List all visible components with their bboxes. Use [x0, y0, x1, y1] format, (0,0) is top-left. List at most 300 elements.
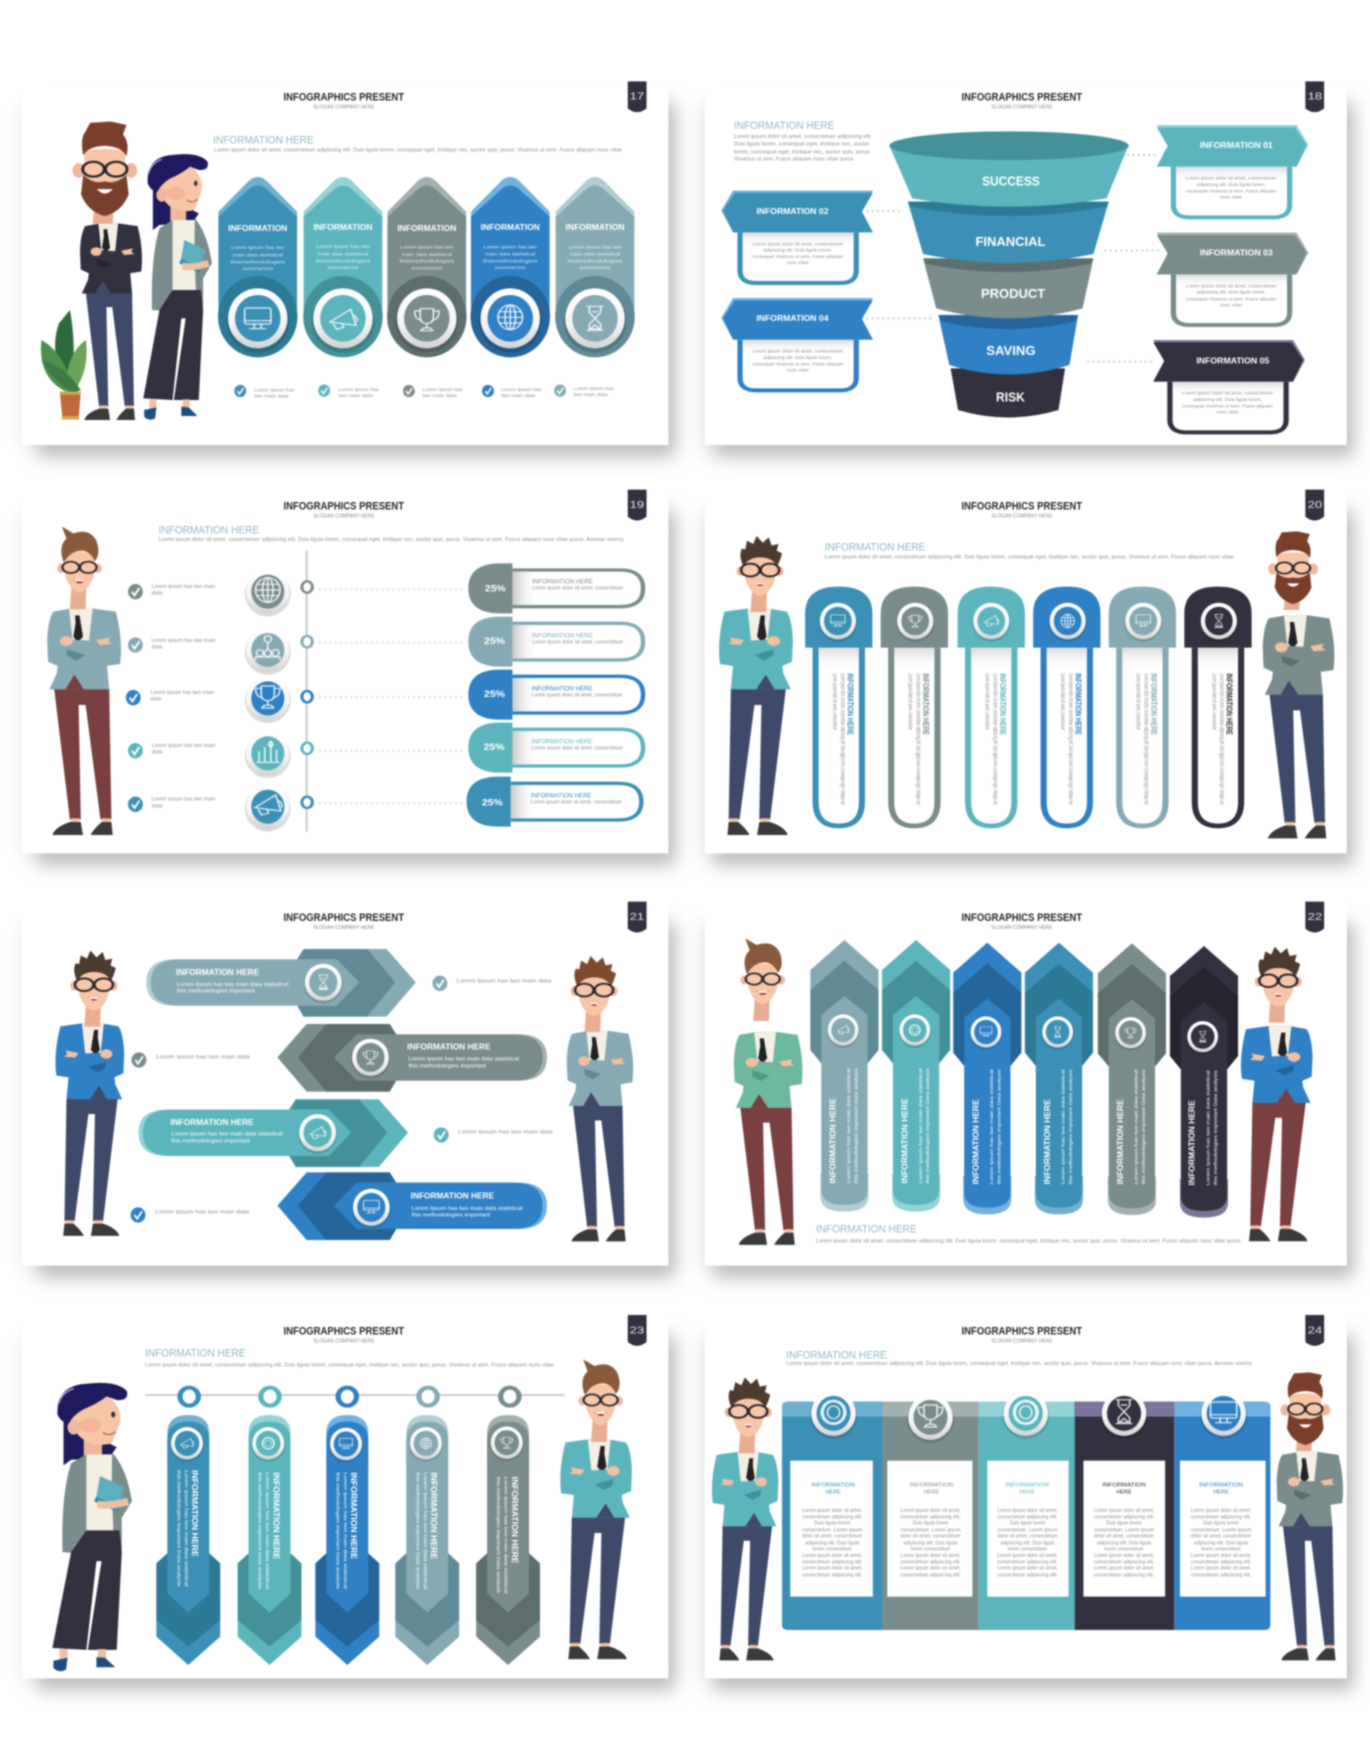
column 3: consectetuer adipiscing elit. — [997, 1515, 1058, 1520]
card 1: INFORMATION — [228, 224, 287, 233]
intro text: Lorem ipsum dolor sit amet, consectetuer adipiscing elit. Duis ligula lorem, consequat eget, tristique nec, auctor quis, purus. Vivamus ut sem. Fusce aliquam nunc vitae purus. Aenean viverra — [159, 538, 624, 543]
callout: information 04 — [721, 298, 873, 390]
banner 2: INFORMATION HERE — [407, 1042, 491, 1051]
banner 3: this methodologies important — [171, 1139, 250, 1144]
title: INFOGRAPHICS PRESENT — [284, 499, 404, 512]
note 1: Lorem Ipsum has two main data — [457, 979, 552, 984]
illustration: man in teal jacket — [712, 1377, 778, 1660]
page number tab: 20 — [1308, 499, 1323, 511]
callout: information 02 — [721, 191, 873, 283]
column 1: consectetuer. Lorem ipsum — [802, 1528, 862, 1533]
callout: information 01: Lorem ipsum dolor sit amet, consectetuer — [1186, 176, 1277, 181]
callout: information 02: nunc vitae — [787, 261, 809, 266]
slogan: SLOGAN COMPANY HERE — [991, 1338, 1053, 1344]
arrow card 1: INFORMATION HERE — [190, 1470, 198, 1557]
card 2 — [303, 177, 383, 357]
arrow card 3: Lorem Ipsum has two main data statistical — [343, 1472, 348, 1589]
card 5: main data statistical — [570, 252, 620, 257]
note 2 — [131, 1052, 251, 1068]
heading: INFORMATION HERE — [145, 1346, 246, 1359]
check notes: Lorem Ipsum has — [501, 388, 542, 393]
capsule 4: Lorem ipsum dolor sit amet, consectetuer adipiscing elit. Duis ligula lorem, consequat eget, tristique nec — [1067, 673, 1073, 805]
arrow card 2: INFORMATION HERE — [902, 1098, 910, 1183]
column 3: consectetuer. Lorem ipsum — [997, 1528, 1058, 1533]
page number tab — [628, 490, 647, 520]
check notes: Lorem Ipsum has — [574, 387, 614, 392]
capsule 6: Lorem ipsum dolor sit amet, consectetuer adipiscing elit. Duis ligula lorem, consequat eget, tristique nec — [1218, 673, 1225, 805]
intro text: lorem, consequat eget, tristique nec, auctor quis, purus. — [734, 150, 871, 155]
intro text: Lorem ipsum dolor sit amet, consectetuer adipiscing elit. — [734, 135, 872, 140]
banner 4: INFORMATION HERE — [411, 1191, 494, 1200]
arrow card 1 — [156, 1415, 220, 1665]
column 4: Lorem ipsum dolor sit amet, — [1094, 1509, 1155, 1514]
arrow card 4: INFORMATION HERE — [429, 1472, 437, 1559]
banner 1 — [146, 949, 416, 1017]
heading: INFORMATION HERE — [786, 1348, 887, 1361]
column 2: Duis ligula lorem — [913, 1521, 949, 1526]
column 1: adipiscing elit. Duis ligula — [805, 1541, 860, 1546]
check notes: two main data — [501, 394, 536, 399]
card 2: thismethodologies — [316, 259, 371, 264]
row 4 — [128, 723, 643, 778]
callout: information 03: INFORMATION 03 — [1200, 249, 1273, 257]
illustration: woman with book — [143, 154, 212, 420]
arrow card 6: this methodologies important Data analysis — [1213, 1070, 1218, 1185]
illustration: plant — [41, 310, 87, 419]
column 5: consectetuer adipiscing elit. — [1191, 1560, 1251, 1565]
row 4: 25% — [484, 742, 505, 753]
callout: information 03: consequat Vivamus ut sem. Fusce aliquam — [1186, 297, 1277, 302]
card 1: Lorem Ipsum has two — [231, 246, 284, 251]
column 3 — [979, 1391, 1075, 1630]
panel: slide 24 — [698, 1315, 1353, 1690]
column 2: Lorem ipsum dolor sit amet, — [900, 1566, 961, 1571]
column 1: INFORMATION — [811, 1482, 855, 1488]
row 1 — [128, 563, 643, 616]
capsule 3: INFORMATION HERE — [998, 673, 1006, 735]
row 1: 25% — [485, 584, 506, 594]
card 3 — [387, 177, 467, 357]
card 1: main data statistical — [233, 253, 283, 258]
row 2: 25% — [484, 636, 505, 647]
row 3: Lorem ipsum has two main — [150, 691, 214, 696]
row 1: Lorem ipsum dolor sit amet, consectetuer — [532, 586, 623, 591]
note 3: Lorem Ipsum has two main data — [458, 1130, 553, 1135]
callout: information 05 — [1153, 340, 1305, 432]
column 3: Lorem ipsum dolor sit amet, — [997, 1554, 1058, 1559]
check notes: two main data — [339, 394, 374, 399]
illustration: bearded man — [1263, 531, 1334, 838]
column 2: lorem consectetuer — [911, 1547, 950, 1552]
row 1: Lorem ipsum has two main — [152, 585, 215, 590]
banner 1: INFORMATION HERE — [176, 968, 259, 977]
illustration: man in grey-blue jacket — [567, 956, 633, 1241]
title: INFOGRAPHICS PRESENT — [962, 1324, 1082, 1337]
callout: information 02: consequat Vivamus ut sem. Fusce aliquam — [752, 255, 844, 260]
arrow card 6: INFORMATION HERE — [1189, 1100, 1197, 1185]
arrow card 1: Lorem Ipsum has two main data statistical — [184, 1470, 189, 1587]
row 3: Lorem ipsum dolor sit amet, consectetuer — [532, 693, 623, 698]
column 1: consectetuer adipiscing elit. — [802, 1560, 863, 1565]
capsule 5 — [1109, 587, 1176, 826]
panel: slide 21 — [20, 902, 675, 1277]
column 5: Lorem ipsum dolor sit amet, — [1191, 1509, 1251, 1514]
column 4: INFORMATION — [1102, 1482, 1146, 1488]
note 3 — [434, 1127, 553, 1143]
page number tab — [628, 81, 647, 112]
page number tab — [628, 1315, 647, 1346]
banner 3: INFORMATION HERE — [170, 1118, 254, 1127]
arrow card 5 — [1098, 943, 1166, 1215]
arrow card 6 — [1170, 946, 1238, 1218]
column 5: Duis ligula lorem — [1203, 1521, 1239, 1526]
column 2: Lorem ipsum dolor sit amet, — [900, 1509, 961, 1514]
column 2 — [882, 1395, 979, 1630]
callout: information 03: nunc vitae — [1220, 303, 1242, 308]
column 2: Lorem ipsum dolor sit amet, — [900, 1554, 961, 1559]
column 3: consectetuer adipiscing elit. — [997, 1560, 1058, 1565]
card 5 — [555, 177, 635, 357]
banner 2: Lorem Ipsum has two main data statistical — [408, 1057, 519, 1062]
card 4 — [470, 177, 550, 357]
funnel label: RISK — [996, 391, 1025, 405]
column 3: consectetuer adipiscing elit. — [997, 1573, 1058, 1578]
intro text — [734, 135, 872, 162]
arrow card 2: this methodologies important Data analysis — [257, 1472, 263, 1589]
column 1: consectetuer adipiscing elit. — [802, 1573, 863, 1578]
card 3: main data statistical — [402, 253, 452, 258]
capsule 3: Lorem ipsum dolor sit amet, consectetuer adipiscing elit. Duis ligula lorem, consequat eget, tristique nec — [991, 673, 998, 805]
capsule 4: Lorem ipsum dolor sit amet, consectetuer — [1059, 673, 1066, 730]
timeline axis — [304, 551, 309, 832]
callout: information 05: nunc vitae — [1217, 410, 1239, 415]
arrow card 2: this methodologies important Data analysis — [925, 1068, 930, 1183]
timeline — [145, 1388, 564, 1406]
heading: INFORMATION HERE — [825, 540, 925, 553]
card 1 — [218, 177, 298, 357]
arrow card 4 — [1025, 943, 1093, 1214]
intro text: Lorem ipsum dolor sit amet, consectetuer adipiscing elit. Duis ligula lorem, consequat eget, tristique nec, auctor quis, purus. Vivamus ut sem. Fusce aliquam nunc vitae — [825, 555, 1234, 560]
arrow card 5: this methodologies important Data analysis — [1141, 1069, 1146, 1184]
arrow card 4: this methodologies important Data analysis — [1068, 1069, 1073, 1184]
column 4: adipiscing elit. Duis ligula — [1097, 1541, 1152, 1546]
card 2: Lorem Ipsum has two — [316, 245, 370, 250]
heading: INFORMATION HERE — [734, 119, 834, 132]
card 1: summarizes — [242, 267, 273, 272]
banner 3: Lorem Ipsum has two main data statistical — [171, 1132, 283, 1137]
arrow card 3: INFORMATION HERE — [973, 1099, 981, 1184]
check notes: Lorem Ipsum has — [422, 388, 463, 393]
column 4: Lorem ipsum dolor sit amet, — [1094, 1566, 1155, 1571]
row 2: data — [152, 645, 163, 650]
column 5 — [1174, 1391, 1270, 1630]
panel: slide 22 — [698, 902, 1353, 1277]
heading: INFORMATION HERE — [159, 523, 259, 536]
check notes: Lorem Ipsum has — [254, 388, 295, 393]
callout: information 01 — [1157, 125, 1308, 217]
capsule 6: INFORMATION HERE — [1224, 673, 1232, 735]
card 4: thismethodologies — [483, 259, 538, 264]
arrow card 3 — [953, 943, 1021, 1214]
slogan: SLOGAN COMPANY HERE — [313, 925, 375, 931]
card 3: summarizes — [412, 266, 442, 271]
funnel label: PRODUCT — [981, 287, 1046, 301]
column 2: dolor sit amet, consectetuer — [900, 1534, 961, 1539]
column 2: adipiscing elit. Duis ligula — [903, 1541, 958, 1546]
callout: information 01: consequat Vivamus ut sem. Fusce aliquam — [1186, 189, 1277, 194]
arrow card 4: INFORMATION HERE — [1045, 1099, 1052, 1184]
page number tab — [1305, 1315, 1324, 1346]
page number tab — [1305, 902, 1324, 932]
heading: INFORMATION HERE — [816, 1222, 917, 1235]
card 2: summarizes — [328, 266, 359, 271]
arrow card 3: Lorem Ipsum has two main data statistical — [988, 1069, 994, 1184]
title: INFOGRAPHICS PRESENT — [284, 1324, 404, 1337]
page number tab: 21 — [630, 911, 644, 923]
column 1: lorem consectetuer — [813, 1547, 852, 1552]
title: INFOGRAPHICS PRESENT — [284, 911, 404, 924]
callout: information 05: consequat Vivamus ut sem. Fusce aliquam — [1182, 404, 1273, 409]
column 4: Duis ligula lorem — [1106, 1521, 1142, 1526]
arrow card 3: this methodologies important Data analysis — [996, 1069, 1002, 1184]
arrow card 2 — [882, 940, 950, 1212]
title: INFOGRAPHICS PRESENT — [962, 911, 1082, 924]
capsule 4: INFORMATION HERE — [1073, 673, 1081, 735]
column 3: adipiscing elit. Duis ligula — [1000, 1541, 1055, 1546]
arrow card 4 — [395, 1415, 459, 1665]
column 1: Duis ligula lorem — [814, 1521, 850, 1526]
capsule 2: Lorem ipsum dolor sit amet, consectetuer — [906, 673, 913, 730]
column 5: Lorem ipsum dolor sit amet, — [1191, 1566, 1251, 1571]
heading: INFORMATION HERE — [213, 133, 314, 146]
card 3: INFORMATION — [397, 224, 457, 233]
illustration: man in grey-blue jacket — [47, 527, 121, 835]
title: INFOGRAPHICS PRESENT — [962, 90, 1082, 103]
capsule 5: Lorem ipsum dolor sit amet, consectetuer — [1134, 673, 1141, 730]
capsule 1: Lorem ipsum dolor sit amet, consectetuer — [831, 673, 838, 730]
intro text: Lorem ipsum dolor sit amet, consectetuer adipiscing elit. Duis ligula lorem, consequat eget, tristique nec, auctor quis, purus. Vivamus ut sem. Fusce aliquam nunc vitae purus. Aenean viverra — [786, 1362, 1252, 1367]
row 3: 25% — [484, 689, 505, 700]
banner 4: this methodologies important — [412, 1213, 491, 1218]
card 2: INFORMATION — [313, 223, 373, 232]
column 2: consectetuer. Lorem ipsum — [900, 1528, 961, 1533]
row 5: Lorem ipsum dolor sit amet, consectetuer — [531, 800, 622, 805]
row 2: INFORMATION HERE — [532, 631, 593, 639]
banner 1: this methodologies important — [177, 989, 255, 994]
callout: information 04: INFORMATION 04 — [756, 314, 829, 323]
title: INFOGRAPHICS PRESENT — [284, 90, 404, 103]
callout: information 05: Lorem ipsum dolor sit amet, consectetuer — [1182, 391, 1273, 396]
capsule 2: Lorem ipsum dolor sit amet, consectetuer adipiscing elit. Duis ligula lorem, consequat eget, tristique nec — [914, 673, 921, 805]
callout: information 03: adipiscing elit. Duis ligula lorem, — [1197, 290, 1266, 295]
column 4: consectetuer adipiscing elit. — [1094, 1573, 1155, 1578]
arrow card 3: INFORMATION HERE — [349, 1472, 357, 1559]
intro text: Duis ligula lorem, consequat eget, tristique nec, auctor — [734, 142, 869, 147]
callout: information 02: adipiscing elit. Duis ligula lorem, — [763, 248, 833, 253]
column 1: Lorem ipsum dolor sit amet, — [802, 1509, 863, 1514]
row 3: data — [150, 697, 162, 702]
callout: information 04: nunc vitae — [787, 368, 809, 373]
column 3: INFORMATION — [1005, 1482, 1049, 1488]
row 1: data — [152, 591, 163, 596]
page number tab — [628, 902, 647, 932]
page number tab: 18 — [1308, 91, 1322, 102]
capsule 2: INFORMATION HERE — [921, 673, 929, 735]
row 2 — [128, 617, 643, 675]
column 1: Lorem ipsum dolor sit amet, — [802, 1554, 863, 1559]
arrow card 4: Lorem Ipsum has two main data statistical — [423, 1472, 428, 1589]
arrow card 1: Lorem Ipsum has two main data statistical — [846, 1068, 851, 1183]
panel: slide 19 — [20, 490, 675, 865]
funnel chart — [889, 131, 1129, 417]
row 4: Lorem ipsum has two main — [152, 744, 215, 749]
slogan: SLOGAN COMPANY HERE — [313, 513, 375, 519]
illustration: bearded man in dark suit — [72, 122, 142, 420]
row 5: data — [152, 804, 163, 809]
note 4 — [131, 1207, 250, 1223]
callout: information 02: INFORMATION 02 — [756, 207, 829, 216]
illustration: man in blue jacket — [56, 951, 124, 1236]
page number tab: 22 — [1308, 911, 1322, 923]
panel: slide 23 — [20, 1315, 675, 1690]
arrow card 1 — [810, 940, 879, 1212]
column 2: consectetuer adipiscing elit. — [900, 1515, 961, 1520]
card 2: main data statistical — [318, 252, 368, 257]
page number tab — [1305, 490, 1324, 520]
column 2: INFORMATION — [910, 1482, 953, 1488]
column 3: Lorem ipsum dolor sit amet, — [997, 1566, 1058, 1571]
callout: information 04: adipiscing elit. Duis ligula lorem, — [763, 356, 833, 361]
row 2: Lorem ipsum dolor sit amet, consectetuer — [532, 640, 623, 645]
arrow card 4: this methodologies important Data analysis — [415, 1472, 421, 1589]
capsule 6 — [1184, 587, 1252, 826]
column 1 — [782, 1391, 882, 1630]
column 5: dolor sit amet, consectetuer — [1191, 1534, 1251, 1539]
column 3: dolor sit amet, consectetuer — [997, 1534, 1058, 1539]
capsule 1: Lorem ipsum dolor sit amet, consectetuer adipiscing elit. Duis ligula lorem, consequat eget, tristique nec — [839, 673, 845, 805]
illustration: man in green jacket — [734, 938, 802, 1245]
arrow card 5: INFORMATION HERE — [1118, 1099, 1125, 1184]
row 3 — [126, 670, 643, 723]
arrow card 2: Lorem Ipsum has two main data statistical — [265, 1472, 271, 1589]
slogan: SLOGAN COMPANY HERE — [991, 513, 1053, 519]
arrow card 4: Lorem Ipsum has two main data statistical — [1060, 1069, 1066, 1184]
panel: slide 20 — [698, 490, 1353, 865]
note 4: Lorem Ipsum has two main data — [155, 1210, 250, 1215]
column 4: dolor sit amet, consectetuer — [1094, 1534, 1154, 1539]
callout: information 05: adipiscing elit. Duis ligula lorem, — [1193, 398, 1263, 403]
card 5: summarizes — [580, 266, 611, 271]
column 3: lorem consectetuer — [1008, 1547, 1047, 1552]
banner 4 — [277, 1172, 547, 1240]
arrow card 5: Lorem Ipsum has two main data statistical — [503, 1477, 509, 1594]
note 2: Lorem Ipsum has two main data — [156, 1055, 251, 1060]
row 4: data — [152, 750, 163, 755]
illustration: bearded man — [1277, 1372, 1343, 1660]
callout: information 03: Lorem ipsum dolor sit amet, consectetuer — [1186, 284, 1277, 289]
column 5: consectetuer adipiscing elit. — [1191, 1515, 1251, 1520]
check notes: two main data — [422, 394, 458, 399]
capsule 1 — [805, 587, 872, 826]
arrow card 6: Lorem Ipsum has two main data statistical — [1205, 1070, 1211, 1185]
card 4: summarizes — [495, 266, 526, 271]
capsule 4 — [1033, 587, 1100, 826]
column 5: lorem consectetuer — [1201, 1547, 1241, 1552]
capsule 3: Lorem ipsum dolor sit amet, consectetuer — [983, 673, 990, 730]
illustration: man in blue jacket — [1241, 947, 1313, 1241]
row 4: INFORMATION HERE — [532, 737, 592, 745]
column 2: HERE — [924, 1489, 940, 1495]
footer text: Lorem ipsum dolor sit amet, consectetuer adipiscing elit. Duis ligula lorem, consequat eget, tristique nec, auctor quis, purus. Vivamus ut sem. Fusce aliquam nunc vitae purus — [816, 1239, 1241, 1244]
check notes — [234, 385, 614, 399]
callout: information 02: Lorem ipsum dolor sit amet, consectetuer — [752, 242, 843, 247]
banner 2 — [277, 1024, 547, 1092]
column 1: dolor sit amet, consectetuer — [802, 1534, 862, 1539]
arrow card 3: this methodologies important Data analysis — [335, 1472, 341, 1589]
column 4: lorem consectetuer — [1104, 1547, 1144, 1552]
capsule 1: INFORMATION HERE — [845, 673, 853, 735]
capsule 5: Lorem ipsum dolor sit amet, consectetuer adipiscing elit. Duis ligula lorem, consequat eget, tristique nec — [1142, 673, 1149, 805]
row 5: 25% — [482, 798, 503, 808]
capsule 5: INFORMATION HERE — [1149, 673, 1157, 735]
column 5: adipiscing elit. Duis ligula — [1194, 1541, 1249, 1546]
column 1: Lorem ipsum dolor sit amet, — [802, 1566, 863, 1571]
column 5: HERE — [1213, 1489, 1229, 1495]
page number tab: 23 — [630, 1325, 644, 1336]
row 5: INFORMATION HERE — [531, 792, 592, 799]
intro text: Lorem ipsum dolor sit amet, consectetuer adipiscing elit. Duis ligula lorem, consequat eget, tristique nec, auctor quis, purus. Vivamus ut sem. Fusce aliquam nunc vitae — [145, 1363, 554, 1368]
arrow card 5: INFORMATION HERE — [510, 1477, 518, 1564]
arrow card 2: Lorem Ipsum has two main data statistical — [917, 1068, 923, 1183]
check notes: two main data — [254, 394, 289, 399]
row 5: Lorem ipsum has two main — [152, 797, 215, 802]
slogan: SLOGAN COMPANY HERE — [313, 104, 375, 110]
page number tab: 19 — [630, 499, 644, 511]
check notes: Lorem Ipsum has — [339, 388, 379, 393]
callout: information 04: Lorem ipsum dolor sit amet, consectetuer — [752, 349, 843, 354]
arrow card 1: INFORMATION HERE — [830, 1098, 838, 1183]
funnel label: SAVING — [986, 344, 1036, 358]
panel: slide 17 — [20, 81, 675, 457]
card 3: Lorem Ipsum has two — [400, 245, 453, 250]
intro text: Lorem ipsum dolor sit amet, consectetuer adipiscing elit. Duis ligula lorem, consequat eget, tristique nec, auctor quis, purus. Vivamus ut sem. Fusce aliquam nunc vitae — [214, 148, 622, 153]
capsule 3 — [958, 587, 1025, 826]
capsule 6: Lorem ipsum dolor sit amet, consectetuer — [1210, 673, 1217, 730]
title: INFOGRAPHICS PRESENT — [962, 499, 1082, 512]
card 4: main data statistical — [485, 252, 535, 257]
arrow card 1: this methodologies important Data analysis — [853, 1068, 859, 1183]
funnel label: FINANCIAL — [976, 235, 1046, 249]
column 3: HERE — [1019, 1489, 1035, 1495]
arrow card 5: this methodologies important Data analysis — [496, 1477, 502, 1593]
row 1: INFORMATION HERE — [532, 578, 593, 585]
slogan: SLOGAN COMPANY HERE — [313, 1338, 375, 1344]
card 5: INFORMATION — [566, 223, 625, 232]
illustration: woman with book — [52, 1383, 132, 1671]
callout: information 01: nunc vitae — [1220, 195, 1242, 200]
dotted connectors — [866, 155, 1161, 362]
card 5: Lorem Ipsum has two — [568, 245, 622, 250]
column 4: HERE — [1116, 1489, 1132, 1495]
page number tab: 24 — [1308, 1325, 1323, 1336]
callout: information 04: consequat Vivamus ut sem. Fusce aliquam — [752, 362, 844, 367]
panel: slide 18 — [698, 81, 1353, 457]
arrow card 2: INFORMATION HERE — [271, 1472, 279, 1559]
column 4: consectetuer adipiscing elit. — [1094, 1515, 1155, 1520]
column 3: Duis ligula lorem — [1010, 1521, 1046, 1526]
banner 1: Lorem Ipsum has two main data statistical — [177, 983, 288, 988]
column 1: HERE — [825, 1489, 841, 1495]
